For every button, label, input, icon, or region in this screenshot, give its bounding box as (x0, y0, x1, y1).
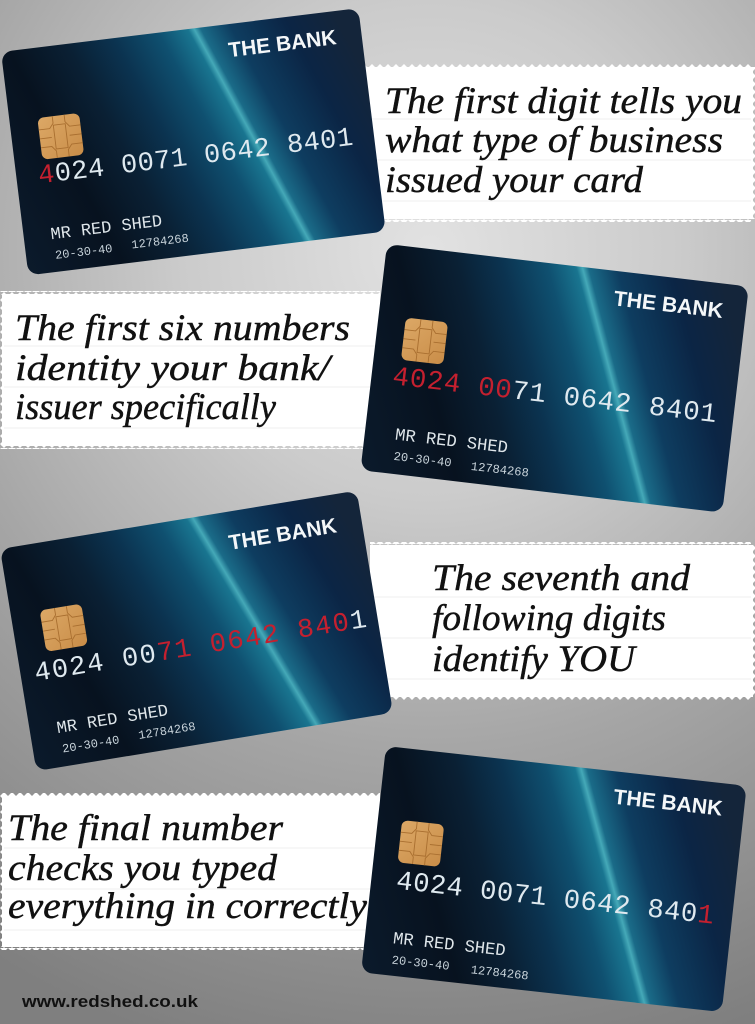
text: first six numbers note: identity your bank/ (15, 348, 334, 389)
cardholder name: MR RED SHED (50, 213, 163, 245)
text: final number note: The final number (8, 808, 284, 849)
text: seventh digit note (432, 558, 691, 680)
text: first six numbers note (15, 308, 350, 428)
cardholder name: MR RED SHED (392, 930, 506, 962)
text: final number note (8, 808, 368, 927)
panel: note strip 2 (0, 291, 380, 449)
card number: 4024 0071 0642 8401 (37, 124, 355, 192)
footer url: www.redshed.co.uk (21, 992, 199, 1011)
sort code: 20-30-40 (54, 242, 113, 263)
sort code: 20-30-40 (391, 954, 450, 974)
account number: 12784268 (137, 720, 197, 743)
panel: note strip 4 (0, 793, 380, 950)
text: first six numbers note: The first six numbers (15, 308, 350, 349)
card number: 4024 0071 0642 8401 (391, 362, 719, 431)
card 2: first six numbers highlighted (360, 244, 749, 513)
text: first digit note: The first digit tells you (385, 81, 742, 122)
icon: chip (397, 820, 444, 867)
account number: 12784268 (470, 963, 529, 984)
sort code: 20-30-40 (393, 450, 452, 470)
text: seventh digit note: identify YOU (432, 639, 637, 680)
text: final number note: everything in correctly (8, 886, 368, 927)
text: seventh digit note: following digits (432, 598, 666, 639)
panel: note strip 3 (370, 542, 755, 700)
text: first digit note: issued your card (385, 160, 644, 201)
panel: note strip 1 (365, 64, 755, 222)
card number: 4024 0071 0642 8401 (32, 605, 370, 690)
sort code: 20-30-40 (61, 733, 121, 756)
card number: 4024 0071 0642 8401 (395, 867, 716, 933)
cardholder name: MR RED SHED (394, 427, 509, 459)
icon: chip (37, 113, 84, 160)
text: final number note: checks you typed (8, 848, 278, 889)
icon: chip (40, 604, 88, 652)
icon: chip (401, 318, 448, 365)
bank name: THE BANK (227, 26, 338, 62)
text: first six numbers note: issuer specifically (15, 387, 277, 428)
card 1: first digit highlighted (1, 8, 386, 275)
account number: 12784268 (131, 232, 190, 252)
bank name: THE BANK (612, 786, 724, 821)
bank name: THE BANK (227, 515, 338, 555)
account number: 12784268 (470, 460, 530, 481)
text: first digit note: what type of business (385, 120, 723, 161)
cardholder name: MR RED SHED (56, 702, 170, 739)
text: seventh digit note: The seventh and (432, 558, 691, 599)
card 4: final number highlighted (361, 746, 747, 1012)
bank name: THE BANK (613, 286, 725, 323)
text: first digit note (385, 81, 742, 201)
card 3: seventh and following digits highlighted (0, 491, 393, 771)
